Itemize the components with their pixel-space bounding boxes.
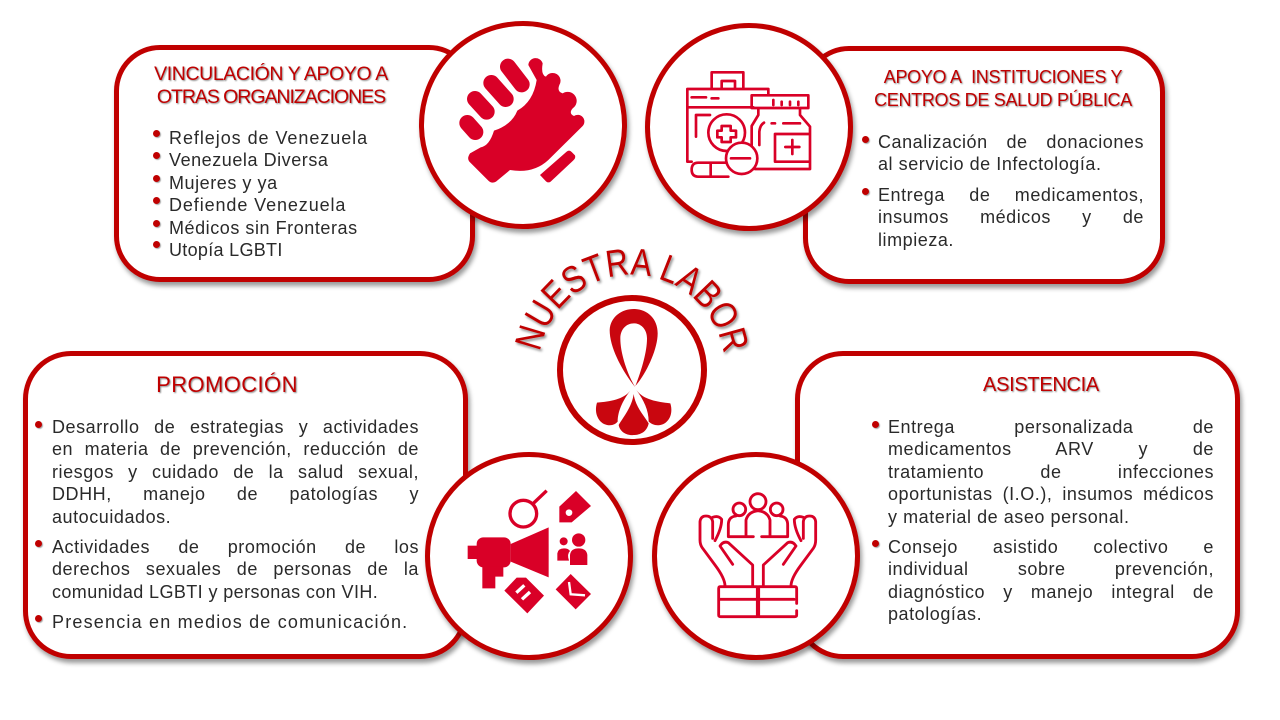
list: organizaciones: Utopía LGBTI [169, 240, 283, 260]
text: promoción: derechos sexuales de personas de la [52, 559, 419, 579]
bullets: asistencia [872, 421, 880, 548]
panel: asistencia [794, 351, 1245, 666]
text: asistencia: diagnóstico y manejo integral de [888, 582, 1214, 602]
circle: asistencia [652, 452, 860, 660]
circle: salud pública [645, 23, 853, 231]
circle: promoción [425, 452, 633, 660]
text: promoción: Desarrollo de estrategias y actividades [52, 417, 419, 437]
title: nuestra labor: NUESTRA LABOR [515, 249, 750, 356]
bullets: organizaciones [153, 130, 162, 250]
heading: vinculación: OTRAS ORGANIZACIONES [157, 86, 385, 108]
list: organizaciones: Mujeres y ya [169, 173, 278, 193]
logo: red ribbon in circle [557, 295, 707, 445]
circle: vinculación [419, 21, 627, 229]
text: asistencia: patologías. [888, 604, 982, 624]
text: instituciones [878, 132, 1144, 250]
heading: instituciones: APOYO A INSTITUCIONES Y [884, 67, 1122, 87]
icon: ribbon [596, 309, 672, 436]
panel: apoyo a instituciones [802, 46, 1170, 291]
text: asistencia: medicamentos ARV y de [888, 439, 1214, 459]
text: asistencia: Consejo asistido colectivo e [888, 537, 1214, 557]
text: asistencia: tratamiento de infecciones [888, 462, 1214, 482]
text: asistencia: y material de aseo personal. [888, 507, 1130, 527]
text: instituciones: limpieza. [878, 230, 954, 250]
list: organizaciones: Defiende Venezuela [169, 195, 346, 215]
text: promoción: en materia de prevención, reducción de [52, 439, 419, 459]
icon: megaphone and marketing [468, 490, 591, 614]
heading: asistencia: ASISTENCIA [983, 374, 1099, 396]
heading: vinculación [154, 63, 390, 108]
text: asistencia [888, 417, 1214, 624]
text: instituciones: Entrega de medicamentos, [878, 185, 1144, 205]
icon: hands holding people [698, 492, 818, 618]
list: organizaciones: Médicos sin Fronteras [169, 218, 358, 238]
text: promoción: riesgos y cuidado de la salud sexual, [52, 462, 419, 482]
text: asistencia: oportunistas (I.O.), insumos médicos [888, 484, 1214, 504]
panel: vinculación y apoyo [113, 45, 480, 289]
text: instituciones: Canalización de donaciones [878, 132, 1144, 152]
list: organizaciones: Venezuela Diversa [169, 150, 328, 170]
list: organizaciones [169, 128, 368, 260]
bullets: instituciones [862, 136, 870, 196]
heading: instituciones: CENTROS DE SALUD PÚBLICA [874, 90, 1132, 110]
heading: vinculación: VINCULACIÓN Y APOYO A [154, 63, 388, 85]
text: promoción: DDHH, manejo de patologías y [52, 484, 419, 504]
heading: instituciones [874, 67, 1134, 110]
text: asistencia: individual sobre prevención, [888, 559, 1214, 579]
text: instituciones: insumos médicos y de [878, 207, 1144, 227]
text: promoción: Presencia en medios de comunicación. [52, 612, 408, 632]
icon: medical kit [686, 71, 812, 178]
text: promoción: Actividades de promoción de los [52, 537, 419, 557]
text: promoción: comunidad LGBTI y personas con VIH. [52, 582, 378, 602]
text: promoción [52, 417, 419, 632]
icon: clasped hands [459, 58, 584, 183]
text: asistencia: Entrega personalizada de [888, 417, 1214, 437]
text: promoción: autocuidados. [52, 507, 171, 527]
bullets: promoción [35, 421, 44, 624]
panel: promoción [22, 351, 473, 666]
text: instituciones: al servicio de Infectología. [878, 154, 1102, 174]
list: organizaciones: Reflejos de Venezuela [169, 128, 368, 148]
heading: promoción: PROMOCIÓN [156, 372, 298, 397]
